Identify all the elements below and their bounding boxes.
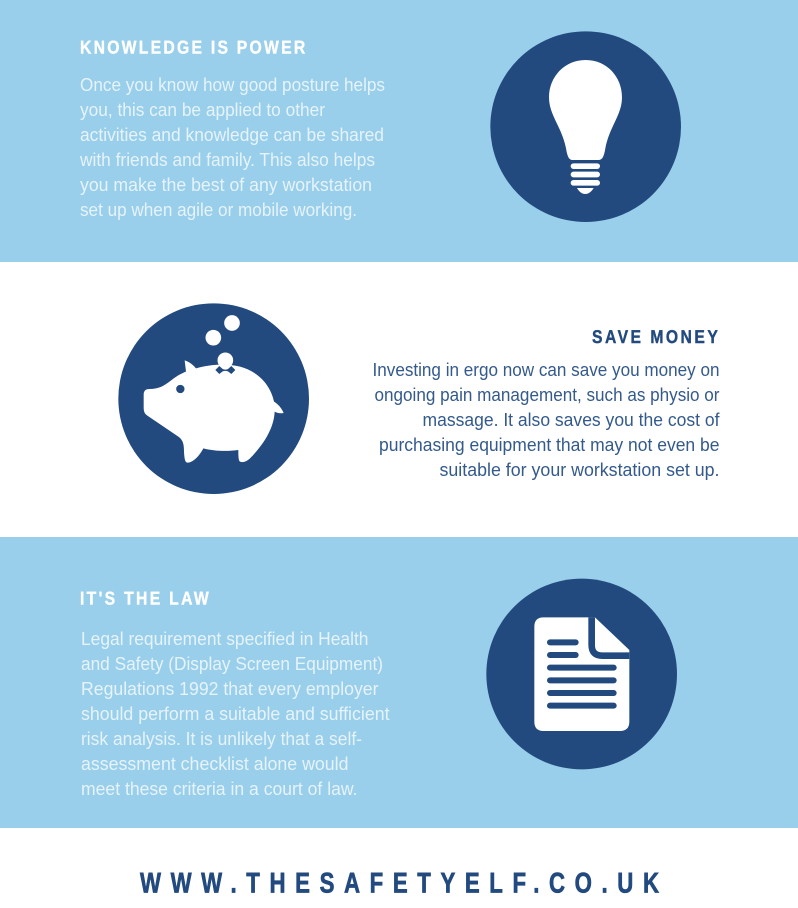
text block: it's the law: Legal requirement specified in Health bbox=[81, 629, 368, 649]
text block: it's the law: risk analysis. It is unlikely that a self- bbox=[81, 729, 362, 749]
text block: knowledge is power: Once you know how good posture helps bbox=[80, 75, 385, 95]
text block: knowledge is power: set up when agile or mobile working. bbox=[80, 200, 357, 220]
panel: save money bbox=[0, 262, 798, 537]
text block: save money: suitable for your workstation set up. bbox=[440, 460, 720, 480]
text block: knowledge is power bbox=[79, 75, 385, 220]
text block: save money: Investing in ergo now can save you money on bbox=[372, 360, 720, 380]
text block: save money: purchasing equipment that may not even be bbox=[379, 435, 720, 455]
text block: save money: massage. It also saves you the cost of bbox=[422, 410, 720, 430]
footer: website address: WWW.THESAFETYELF.CO.UK bbox=[140, 868, 659, 900]
icon: piggy bank bbox=[118, 303, 309, 494]
text block: it's the law: meet these criteria in a court of law. bbox=[81, 779, 358, 799]
text block: it's the law: Regulations 1992 that every employer bbox=[81, 679, 378, 699]
panel: it's the law bbox=[0, 537, 798, 828]
panel: knowledge is power bbox=[0, 0, 798, 262]
text block: save money: ongoing pain management, such as physio or bbox=[374, 385, 720, 405]
text block: knowledge is power: you make the best of any workstation bbox=[80, 175, 372, 195]
icon: document bbox=[486, 579, 677, 769]
text block: it's the law: assessment checklist alone would bbox=[81, 754, 348, 774]
text block: it's the law bbox=[81, 629, 390, 799]
heading: save money: SAVE MONEY bbox=[592, 326, 718, 347]
icon: light bulb bbox=[490, 31, 681, 222]
text block: save money bbox=[372, 360, 720, 480]
text block: knowledge is power: with friends and family. This also helps bbox=[79, 150, 375, 170]
text block: knowledge is power: activities and knowledge can be shared bbox=[80, 125, 384, 145]
text block: knowledge is power: you, this can be applied to other bbox=[80, 100, 325, 120]
text block: it's the law: and Safety (Display Screen Equipment) bbox=[81, 654, 383, 674]
heading: it's the law: IT'S THE LAW bbox=[80, 588, 209, 608]
heading: knowledge is power: KNOWLEDGE IS POWER bbox=[80, 36, 305, 58]
text block: it's the law: should perform a suitable and sufficient bbox=[81, 704, 390, 724]
